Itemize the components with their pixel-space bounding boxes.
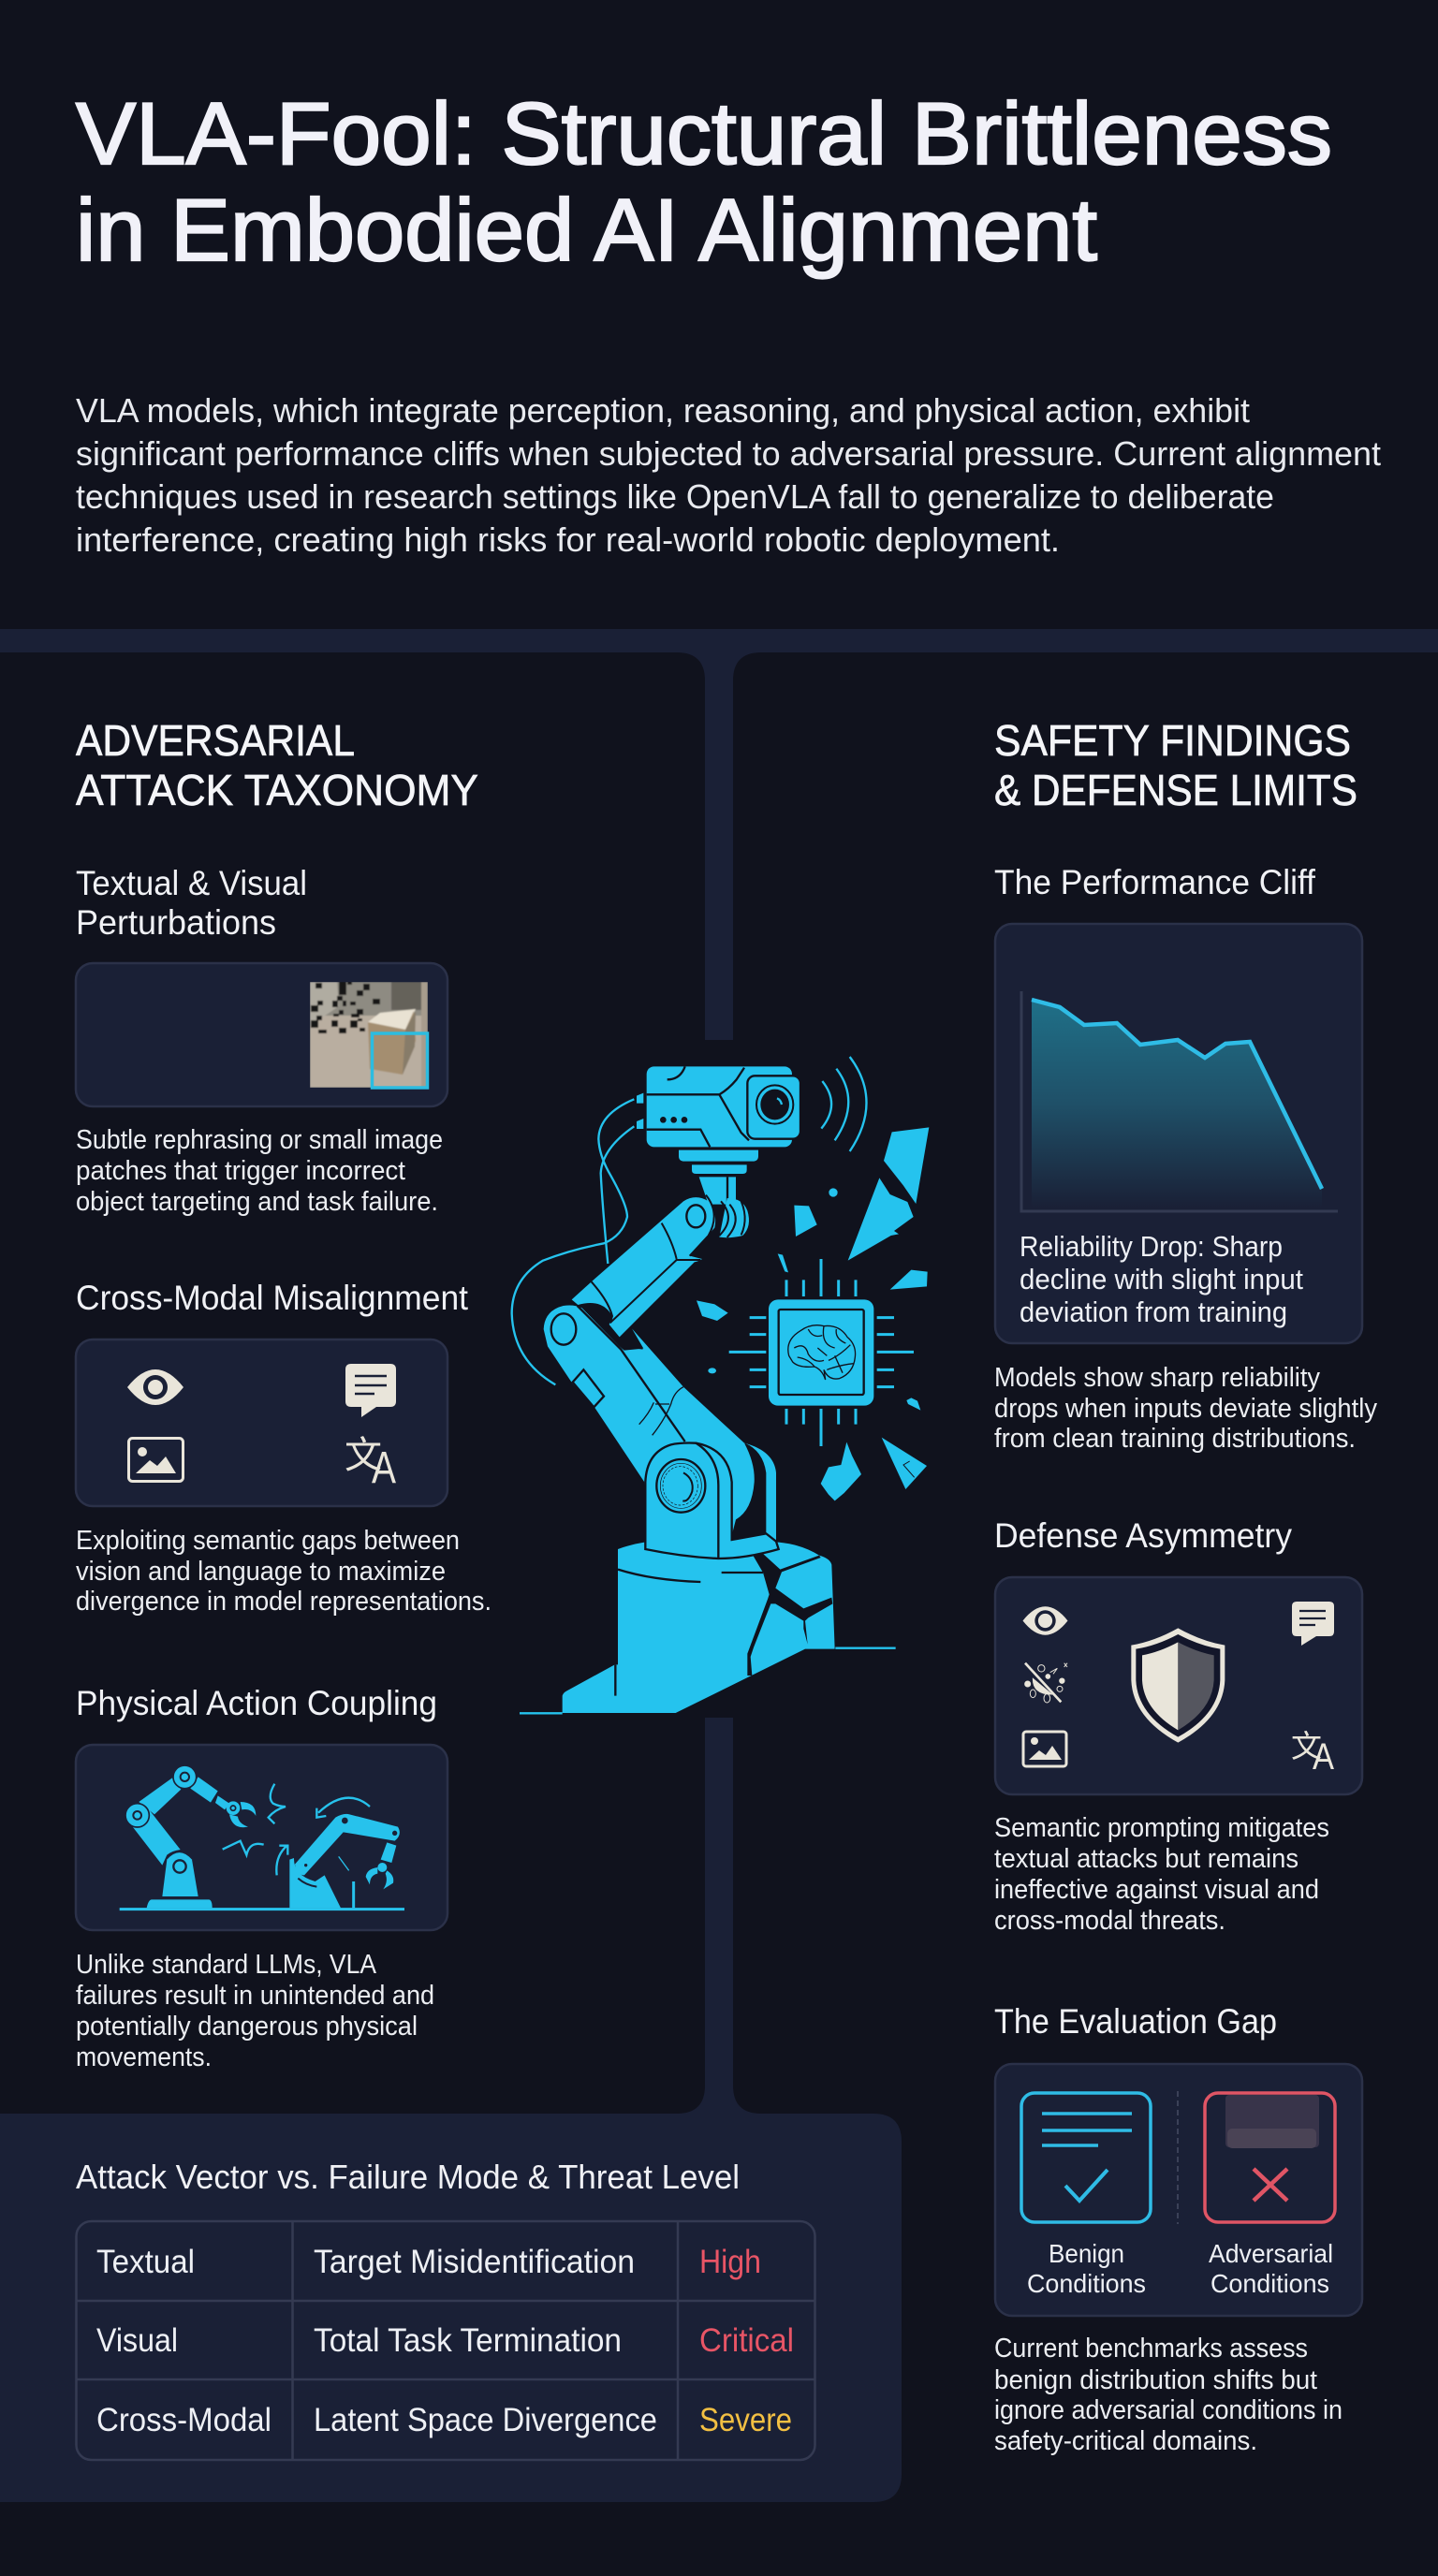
text: defense asymmetry description bbox=[994, 1813, 1329, 1936]
icon: translate bbox=[1291, 1729, 1334, 1778]
subheading: the evaluation gap: The Evaluation Gap bbox=[994, 2002, 1277, 2041]
icon: translate: A bbox=[372, 1443, 396, 1493]
icon: chat bubble bbox=[1292, 1602, 1334, 1646]
heading: adversarial attack taxonomy: ADVERSARIAL bbox=[76, 716, 355, 765]
debris shards bbox=[697, 1127, 929, 1500]
label: benign conditions bbox=[1027, 2239, 1146, 2298]
text: perturbations description: patches that trigger incorrect bbox=[76, 1156, 405, 1186]
text: defense asymmetry description: Semantic prompting mitigates bbox=[994, 1813, 1329, 1843]
text: perturbations description bbox=[76, 1125, 443, 1217]
title bbox=[76, 84, 1332, 279]
icon: eye bbox=[127, 1369, 183, 1405]
illustration: damaged robot arm with camera and AI chip bbox=[512, 1057, 929, 1713]
row: cross-modal: Cross-Modal bbox=[96, 2402, 271, 2438]
label: benign conditions: Conditions bbox=[1027, 2269, 1146, 2298]
chart caption bbox=[1020, 1230, 1303, 1328]
text: cross-modal description: Exploiting semantic gaps between bbox=[76, 1526, 460, 1556]
image: patched scene with target box bbox=[310, 982, 428, 1088]
text: perturbations description: Subtle rephrasing or small image bbox=[76, 1125, 443, 1155]
icon: chat bubble bbox=[345, 1364, 396, 1417]
text: physical action description: Unlike standard LLMs, VLA bbox=[76, 1950, 377, 1980]
text: performance cliff description: Models show sharp reliability bbox=[994, 1363, 1320, 1393]
icon: shield half filled bbox=[1131, 1628, 1225, 1743]
cables bbox=[512, 1099, 634, 1384]
row: textual: Target Misidentification bbox=[314, 2244, 635, 2280]
row: cross-modal bbox=[96, 2402, 792, 2438]
text: evaluation gap description bbox=[994, 2334, 1343, 2456]
table heading: Attack Vector vs. Failure Mode & Threat Level bbox=[76, 2158, 740, 2196]
intro paragraph: techniques used in research settings like OpenVLA fall to generalize to deliberate bbox=[76, 477, 1274, 516]
title: in Embodied AI Alignment bbox=[76, 181, 1097, 279]
icon: translate: 文 bbox=[345, 1435, 382, 1476]
row: cross-modal: Severe bbox=[699, 2402, 792, 2438]
area chart: reliability drop bbox=[1021, 991, 1338, 1211]
subheading: physical action coupling: Physical Action Coupling bbox=[76, 1684, 437, 1722]
chart caption: deviation from training bbox=[1020, 1295, 1287, 1328]
text: cross-modal description: divergence in model representations. bbox=[76, 1587, 492, 1617]
camera body bbox=[637, 1066, 800, 1147]
panel: adversarial attack taxonomy bbox=[76, 716, 492, 2072]
subheading: defense asymmetry: Defense Asymmetry bbox=[994, 1516, 1292, 1555]
heading: adversarial attack taxonomy bbox=[76, 716, 478, 814]
header bbox=[76, 84, 1381, 559]
table: attack vector, failure mode, threat level bbox=[77, 2221, 814, 2460]
row: visual bbox=[96, 2322, 794, 2359]
row: textual bbox=[96, 2244, 761, 2280]
layout frame: divider bar, spine and table panel bbox=[0, 629, 1438, 2502]
label: adversarial conditions: Adversarial bbox=[1209, 2239, 1333, 2268]
icon: eye bbox=[1022, 1606, 1067, 1635]
row: cross-modal: Latent Space Divergence bbox=[314, 2402, 657, 2438]
text: evaluation gap description: benign distribution shifts but bbox=[994, 2365, 1317, 2395]
row: textual: High bbox=[699, 2244, 761, 2280]
subheading: textual and visual perturbations: Textual & Visual bbox=[76, 864, 307, 902]
icon: image bbox=[1023, 1732, 1066, 1766]
text: perturbations description: object targeting and task failure. bbox=[76, 1187, 438, 1217]
text: physical action description bbox=[76, 1950, 434, 2072]
heading: adversarial attack taxonomy: ATTACK TAXONOMY bbox=[76, 766, 478, 814]
intro paragraph: interference, creating high risks for real-world robotic deployment. bbox=[76, 520, 1060, 559]
panel: threat table bbox=[76, 2158, 814, 2460]
heading: safety findings and defense limits: SAFETY FINDINGS bbox=[994, 716, 1351, 765]
AI chip with brain bbox=[729, 1259, 914, 1446]
upper arm bbox=[551, 1195, 715, 1345]
label: adversarial conditions bbox=[1209, 2239, 1333, 2298]
subheading: cross-modal misalignment: Cross-Modal Misalignment bbox=[76, 1279, 469, 1317]
text: physical action description: failures result in unintended and bbox=[76, 1981, 434, 2011]
text: evaluation gap description: Current benchmarks assess bbox=[994, 2334, 1308, 2364]
camera mount and neck bbox=[679, 1150, 758, 1205]
text: defense asymmetry description: textual attacks but remains bbox=[994, 1844, 1299, 1874]
heading: safety findings and defense limits: & DEFENSE LIMITS bbox=[994, 766, 1357, 814]
intro paragraph bbox=[76, 391, 1381, 559]
signal waves bbox=[821, 1057, 866, 1151]
label: adversarial conditions: Conditions bbox=[1211, 2269, 1329, 2298]
text: evaluation gap description: safety-critical domains. bbox=[994, 2426, 1257, 2456]
text: cross-modal description: vision and language to maximize bbox=[76, 1557, 446, 1587]
text: defense asymmetry description: ineffective against visual and bbox=[994, 1875, 1319, 1905]
row: visual: Critical bbox=[699, 2322, 794, 2359]
card: malfunctioning robot arms bbox=[76, 1745, 448, 1930]
icon: adversarial document with cross bbox=[1205, 2093, 1335, 2222]
chart caption: decline with slight input bbox=[1020, 1263, 1303, 1295]
intro paragraph: significant performance cliffs when subjected to adversarial pressure. Current alignment bbox=[76, 434, 1381, 473]
card: benign versus adversarial conditions bbox=[995, 2064, 1362, 2316]
card: perturbed image bbox=[76, 963, 448, 1106]
right yoke plate and gap bbox=[732, 1443, 776, 1551]
icon: benign document with check bbox=[1021, 2093, 1151, 2222]
title: VLA-Fool: Structural Brittleness bbox=[76, 84, 1332, 183]
text: physical action description: movements. bbox=[76, 2042, 212, 2072]
wrist joint bbox=[719, 1196, 749, 1237]
text: performance cliff description: from clean training distributions. bbox=[994, 1424, 1356, 1454]
text: performance cliff description bbox=[994, 1363, 1377, 1454]
subheading: the performance cliff: The Performance Cliff bbox=[994, 863, 1316, 901]
panel: safety findings and defense limits bbox=[994, 716, 1377, 2456]
icon: translate: 文 bbox=[1291, 1729, 1322, 1764]
row: textual: Textual bbox=[96, 2244, 195, 2280]
text: physical action description: potentially dangerous physical bbox=[76, 2012, 418, 2042]
icon: brain bbox=[788, 1325, 856, 1380]
card: cross-modal icons bbox=[76, 1339, 448, 1506]
card: defense shield with modalities bbox=[995, 1577, 1362, 1794]
row: visual: Visual bbox=[96, 2322, 178, 2359]
card: reliability chart bbox=[995, 924, 1362, 1343]
subheading: textual and visual perturbations: Perturbations bbox=[76, 903, 276, 942]
cracked base bbox=[520, 1543, 896, 1713]
base joint bbox=[656, 1459, 705, 1513]
subheading: textual and visual perturbations bbox=[76, 864, 307, 942]
chart caption: Reliability Drop: Sharp bbox=[1020, 1230, 1283, 1263]
label: benign conditions: Benign bbox=[1049, 2239, 1124, 2268]
lower arm bbox=[544, 1306, 755, 1542]
text: evaluation gap description: ignore adversarial conditions in bbox=[994, 2395, 1343, 2425]
row: visual: Total Task Termination bbox=[314, 2322, 622, 2359]
text: defense asymmetry description: cross-modal threats. bbox=[994, 1906, 1225, 1936]
yoke bbox=[645, 1443, 779, 1559]
icon: struck-through noise bbox=[1025, 1663, 1067, 1703]
icon: image bbox=[129, 1438, 183, 1481]
icon: translate: A bbox=[1313, 1736, 1334, 1778]
divider bbox=[1177, 2091, 1179, 2224]
icon: two robot arms bbox=[120, 1765, 404, 1910]
text: performance cliff description: drops when inputs deviate slightly bbox=[994, 1394, 1377, 1424]
intro paragraph: VLA models, which integrate perception, reasoning, and physical action, exhibit bbox=[76, 391, 1250, 430]
icon: translate bbox=[345, 1435, 396, 1493]
text: cross-modal description bbox=[76, 1526, 492, 1617]
heading: safety findings and defense limits bbox=[994, 716, 1357, 814]
